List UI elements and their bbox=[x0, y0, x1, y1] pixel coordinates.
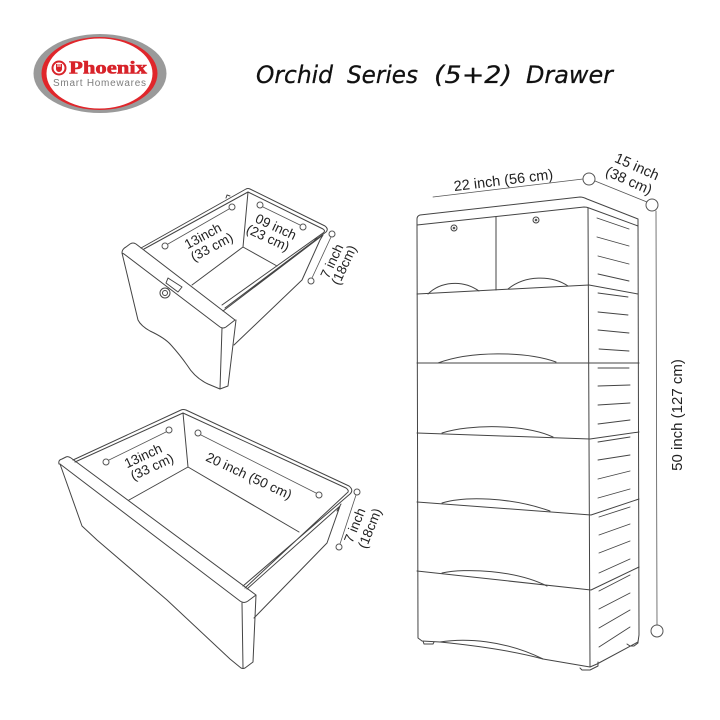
small drawer width dimension: 13inch bbox=[182, 220, 224, 252]
small drawer illustration bbox=[122, 188, 360, 389]
depth dimension bbox=[595, 151, 661, 211]
large drawer height dimension bbox=[336, 489, 385, 551]
large drawer front panel bbox=[59, 457, 256, 668]
drawer knobs bbox=[451, 217, 539, 231]
large drawer illustration bbox=[59, 410, 385, 668]
title: (5+2) bbox=[434, 61, 512, 89]
width dimension: 22 inch (56 cm) bbox=[453, 167, 554, 195]
title bbox=[256, 61, 615, 89]
drawer handle arcs bbox=[428, 278, 568, 659]
large drawer height dimension: (18cm) bbox=[355, 506, 385, 551]
small drawer width dimension bbox=[162, 204, 236, 264]
large drawer depth dimension: 20 inch (50 cm) bbox=[204, 449, 294, 502]
title: Orchid bbox=[256, 61, 334, 89]
depth dimension: (38 cm) bbox=[603, 164, 654, 199]
height dimension bbox=[651, 211, 686, 637]
small drawer height dimension bbox=[308, 231, 360, 287]
width dimension bbox=[433, 167, 595, 197]
cabinet feet bbox=[423, 641, 638, 670]
side ventilation slats bbox=[597, 218, 630, 647]
cabinet outline bbox=[417, 197, 639, 667]
title: Series bbox=[347, 61, 418, 89]
depth dimension: 15 inch bbox=[612, 151, 661, 184]
icon: phoenix emblem bbox=[52, 62, 66, 74]
large drawer width dimension: 13inch bbox=[122, 441, 164, 471]
small drawer depth dimension: 09 inch bbox=[253, 211, 299, 243]
small drawer rim and inner walls bbox=[141, 188, 327, 345]
large drawer height dimension: 7 inch bbox=[341, 506, 369, 545]
small drawer height dimension: (18cm) bbox=[328, 243, 360, 287]
small drawer height dimension: 7 inch bbox=[318, 242, 346, 281]
logo: Phoenix Smart Homewares bbox=[34, 34, 166, 113]
title: Drawer bbox=[526, 61, 615, 89]
small drawer depth dimension: (23 cm) bbox=[244, 221, 292, 254]
height dimension: 50 inch (127 cm) bbox=[669, 359, 686, 471]
small drawer lock bbox=[160, 278, 182, 298]
small drawer front panel bbox=[122, 243, 236, 389]
large drawer rim and inner walls bbox=[73, 410, 352, 618]
small drawer depth dimension bbox=[244, 202, 306, 254]
large drawer width dimension: (33 cm) bbox=[128, 450, 176, 483]
logo tagline: Smart Homewares bbox=[53, 78, 146, 89]
large drawer width dimension bbox=[103, 427, 176, 483]
cabinet illustration bbox=[417, 151, 686, 670]
large drawer depth dimension bbox=[195, 430, 322, 502]
drawer dividers bbox=[417, 285, 639, 590]
small drawer width dimension: (33 cm) bbox=[188, 230, 236, 264]
cabinet top and front edge bbox=[417, 207, 638, 667]
logo wordmark: Phoenix bbox=[69, 58, 147, 78]
